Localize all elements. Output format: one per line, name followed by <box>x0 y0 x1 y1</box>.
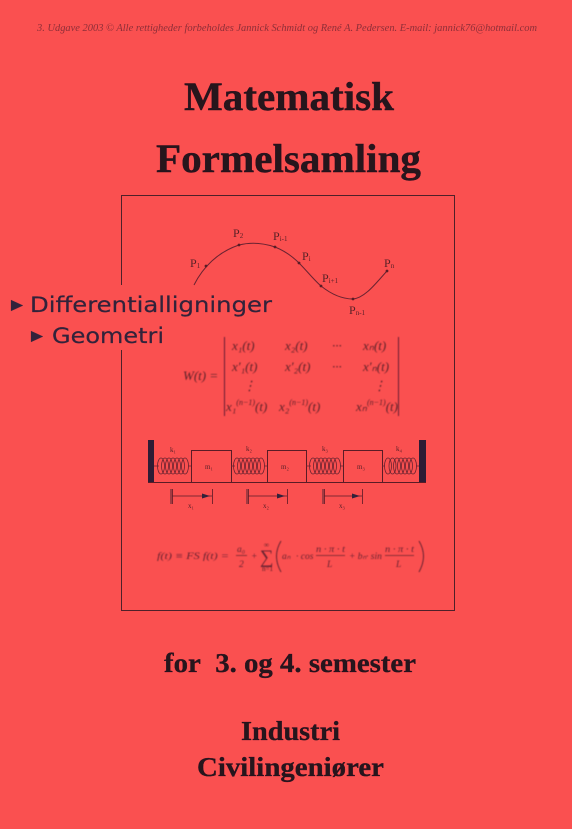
spring mass system diagram: x₃ <box>339 502 346 510</box>
curve through points: P <box>322 271 329 285</box>
curve through points: n <box>391 262 395 270</box>
spring mass system diagram: k₂ <box>246 445 252 453</box>
Fourier series formula: ∞ <box>264 541 269 549</box>
curve through points: 2 <box>240 232 244 240</box>
Fourier series formula <box>157 541 424 573</box>
Wronskian formula: xₙ <box>356 399 367 414</box>
curve through points: i-1 <box>280 235 288 243</box>
Fourier series formula: + bₙ <box>349 552 367 562</box>
curve through points: 1 <box>197 262 201 270</box>
curve through points: P <box>190 256 197 270</box>
spring mass system diagram: x₂ <box>263 502 270 510</box>
displacement arrows <box>172 489 362 504</box>
bullet list: Geometri <box>52 324 164 348</box>
Wronskian formula: x₂(t) <box>284 338 308 353</box>
bullet list <box>11 293 272 348</box>
Fourier series formula: f(t) ≡ FS f(t) = <box>157 551 229 562</box>
base and masses <box>148 450 426 482</box>
Wronskian formula: (n−1) <box>236 398 255 407</box>
audience: Civilingeniører <box>197 752 384 782</box>
subtitle: for 3. og 4. semester <box>164 648 416 678</box>
Fourier series formula: n · π · t <box>385 545 414 555</box>
spring mass system diagram: m₁ <box>205 463 213 471</box>
audience <box>197 716 384 782</box>
spring and mass labels: k₁ <box>170 446 176 454</box>
title: Matematisk <box>184 74 395 119</box>
title: Formelsamling <box>156 136 421 181</box>
Fourier series formula: a₀ <box>237 545 245 555</box>
Fourier series formula: aₙ <box>282 552 291 562</box>
spring mass system diagram: m₃ <box>357 463 365 471</box>
curve through points: n-1 <box>356 309 366 317</box>
Fourier series formula: ∑ <box>260 547 274 568</box>
Wronskian formula: x₁ <box>226 399 236 414</box>
Fourier series formula: n=1 <box>262 565 273 573</box>
curve through points: P <box>302 249 309 263</box>
walls <box>148 440 426 482</box>
Wronskian formula: (n−1) <box>289 398 308 407</box>
spring mass system diagram: k₃ <box>322 445 328 453</box>
framed illustration panel <box>122 196 454 610</box>
spring mass system diagram: x₁ <box>188 502 194 510</box>
Wronskian formula: x₁(t) <box>231 338 255 353</box>
Wronskian formula: (n−1) <box>367 398 386 407</box>
bullet list: Differentialligninger <box>30 293 272 317</box>
Wronskian formula: ⋮ <box>373 378 386 393</box>
Wronskian formula: x′₂(t) <box>284 359 310 374</box>
audience: Industri <box>241 716 341 746</box>
Wronskian formula: W(t) = <box>183 368 218 383</box>
Wronskian formula: (t) <box>308 399 320 414</box>
Wronskian formula <box>183 337 398 416</box>
Fourier series formula: · cos <box>296 552 314 562</box>
Wronskian formula: (t) <box>386 399 398 414</box>
spring mass system diagram: k₄ <box>396 445 402 453</box>
spring mass system diagram <box>148 440 426 510</box>
Wronskian formula: x′₁(t) <box>231 359 257 374</box>
curve through points <box>190 226 395 317</box>
curve through points: i+1 <box>329 277 339 285</box>
Fourier series formula: + <box>251 552 257 562</box>
Wronskian formula: (t) <box>255 399 267 414</box>
title <box>156 74 421 181</box>
Wronskian formula: ··· <box>332 338 342 353</box>
curve through points: P <box>349 303 356 317</box>
Wronskian formula: x₂ <box>279 399 289 414</box>
Wronskian formula: x′ₙ(t) <box>362 359 389 374</box>
curve through points: P <box>273 229 280 243</box>
curve through points: P <box>384 256 391 270</box>
Fourier series formula: · sin <box>366 552 382 562</box>
spring mass system diagram: m₂ <box>281 463 289 471</box>
Fourier series formula: L <box>395 560 401 570</box>
copyright line: 3. Udgave 2003 © Alle rettigheder forbeholdes Jannick Schmidt og René A. Pedersen. E-mail: jannick76@hotmail.com <box>36 23 537 34</box>
springs <box>154 458 419 474</box>
Fourier series formula: 2 <box>239 560 244 570</box>
Fourier series formula: n · π · t <box>316 545 345 555</box>
curve through points: P <box>233 226 240 240</box>
Fourier series formula: L <box>326 560 332 570</box>
curve through points: i <box>309 255 311 263</box>
Wronskian formula: ··· <box>332 359 342 374</box>
Wronskian formula: xₙ(t) <box>362 338 386 353</box>
Wronskian formula: ⋮ <box>243 378 256 393</box>
